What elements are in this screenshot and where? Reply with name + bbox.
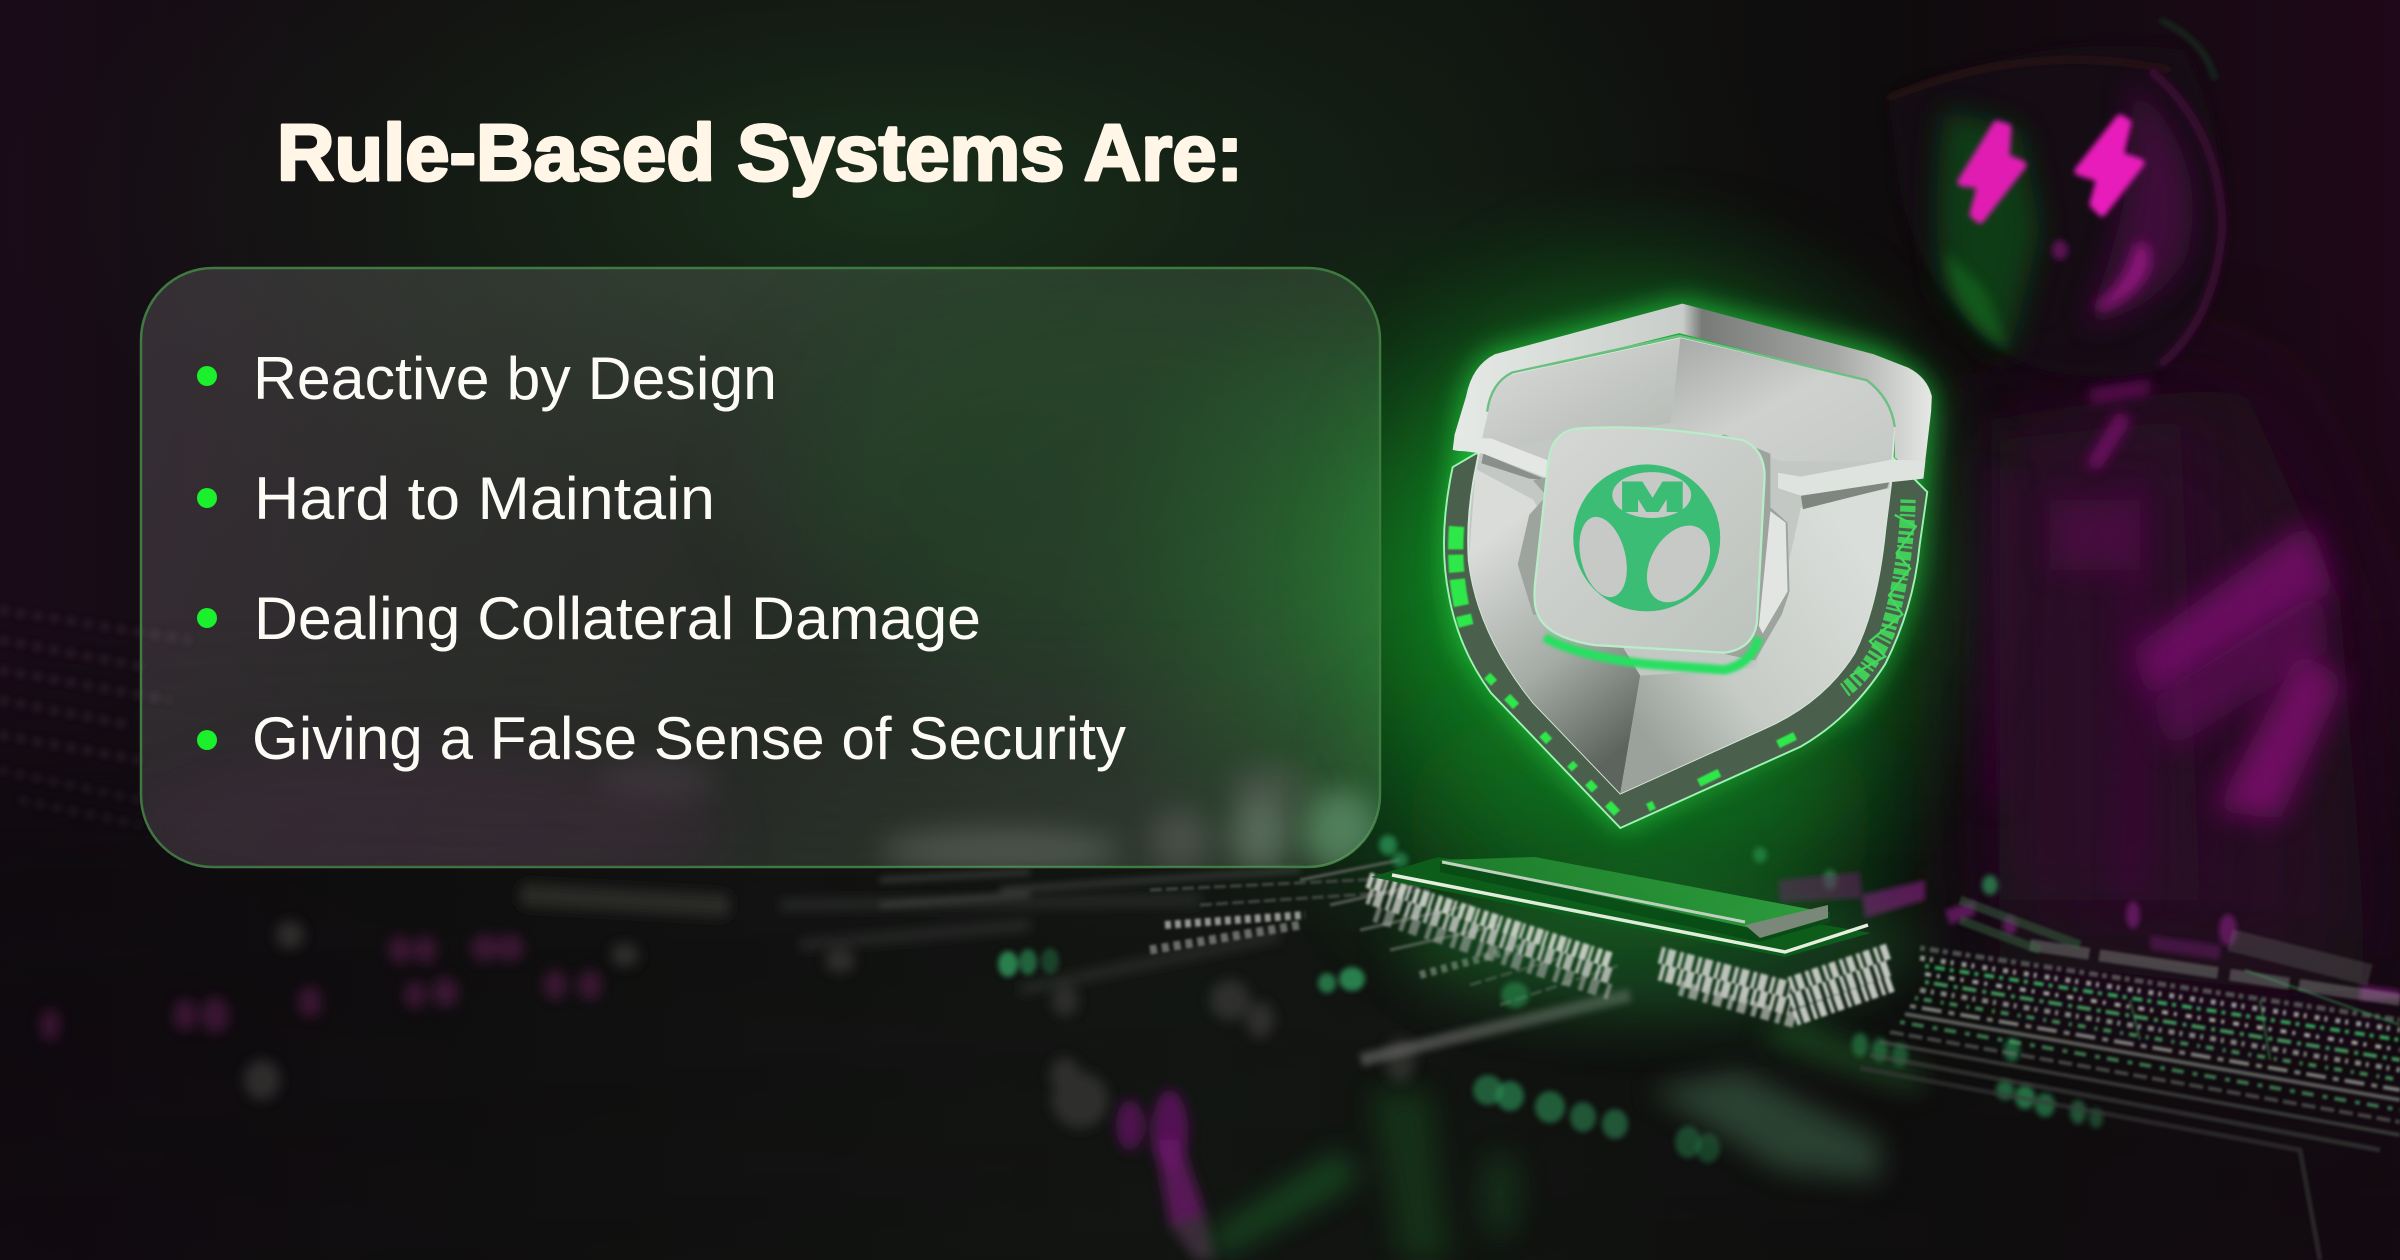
hacker eye: left lightning bolt <box>1962 125 2022 219</box>
hacker eye: right lightning bolt <box>2079 119 2140 212</box>
panel background <box>141 268 1380 867</box>
left-side blurred traces <box>0 610 190 825</box>
panel smudges <box>144 319 1379 867</box>
central glow under chip <box>1400 880 1920 1020</box>
shield glass rim <box>1444 454 1927 828</box>
title: Rule-Based Systems Are: <box>277 108 1243 197</box>
bullet: Reactive by Design: Reactive by Design <box>253 345 777 412</box>
circuit board <box>0 610 2400 1260</box>
tile green glow <box>1545 637 1759 670</box>
grey bokeh dots <box>244 921 1415 1128</box>
bullet: Hard to Maintain: Hard to Maintain <box>254 465 715 532</box>
panel: rule-based system traits <box>130 268 1420 910</box>
purple bokeh left <box>40 934 602 1041</box>
mid traces left of chip <box>880 860 1630 1060</box>
shield top rim <box>1453 304 1932 477</box>
chip top face <box>1438 857 1830 930</box>
pink components right of chip <box>1778 872 2400 1000</box>
green soft streaks bottom <box>1200 1020 1920 1260</box>
logo: green circle with M: M <box>1620 475 1685 519</box>
dense traces right of chip <box>1860 900 2400 1260</box>
chip base <box>1371 857 1871 957</box>
chip silver pins <box>1368 880 1892 1022</box>
shield icon <box>1444 304 1932 828</box>
logo: green circle with M <box>1572 464 1723 613</box>
bullet: Dealing Collateral Damage: Dealing Collateral Damage <box>254 585 981 652</box>
shield lower left facet <box>1469 469 1640 794</box>
tile face <box>1535 427 1765 653</box>
shield side straps <box>1455 438 1550 479</box>
tile side housing <box>1518 435 1789 660</box>
hacker hood <box>1888 20 2222 377</box>
decorative glow behind shield <box>1390 280 1935 860</box>
processor chip <box>1368 857 1892 1022</box>
shield silver body <box>1468 338 1895 794</box>
shield upper left facet <box>1480 338 1680 450</box>
shield green inner line <box>1487 336 1895 427</box>
faded traces below panel <box>520 883 1280 990</box>
hacker body <box>1990 378 2370 1000</box>
bullet: Giving a False Sense of Security: Giving a False Sense of Security <box>252 705 1126 772</box>
shield upper right facet <box>1671 338 1895 461</box>
shield circuit traces <box>1843 500 1908 691</box>
green bokeh dots <box>998 835 2103 1163</box>
shield circuit glow marks <box>1456 526 1801 813</box>
chip edge highlights <box>1392 875 1868 952</box>
shield lower right facet <box>1620 488 1891 794</box>
purple pill bottom <box>1116 1090 1215 1260</box>
hooded hacker figure <box>1888 20 2370 1000</box>
